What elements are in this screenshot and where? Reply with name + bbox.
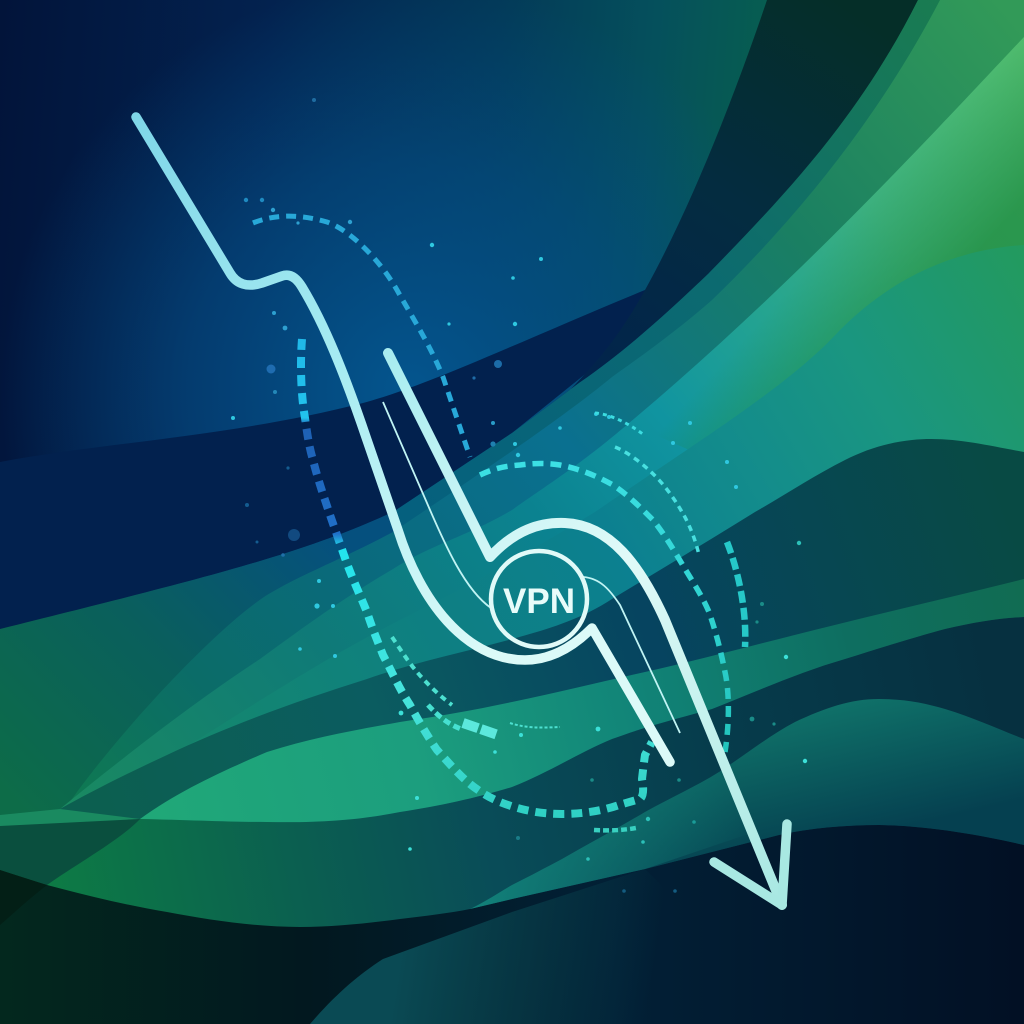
VPN badge — [491, 551, 587, 647]
dashed arc: upper blue — [253, 216, 470, 457]
arrow: front falling line — [136, 117, 670, 762]
scattered particles — [231, 98, 807, 893]
dashed arc: lower thin — [510, 723, 560, 728]
dashed arc: lower thick — [463, 723, 498, 735]
dashed arc: upper center ring — [480, 464, 728, 752]
dashed arc: lower short — [428, 705, 461, 729]
arrow: second falling line with head — [388, 353, 782, 905]
dashed arc: bottom short — [594, 828, 636, 830]
dashed arc: right short — [727, 542, 745, 647]
line: thin left trace — [383, 402, 491, 608]
line: thin right trace — [583, 577, 680, 733]
dashed arc: inner right dots — [615, 447, 699, 555]
dashed arc: small upper — [595, 413, 644, 435]
arrow head — [714, 824, 787, 905]
VPN badge: VPN — [503, 582, 575, 621]
dashed arc: lower inner — [392, 637, 452, 705]
dashed arc: large left ring — [301, 339, 652, 814]
